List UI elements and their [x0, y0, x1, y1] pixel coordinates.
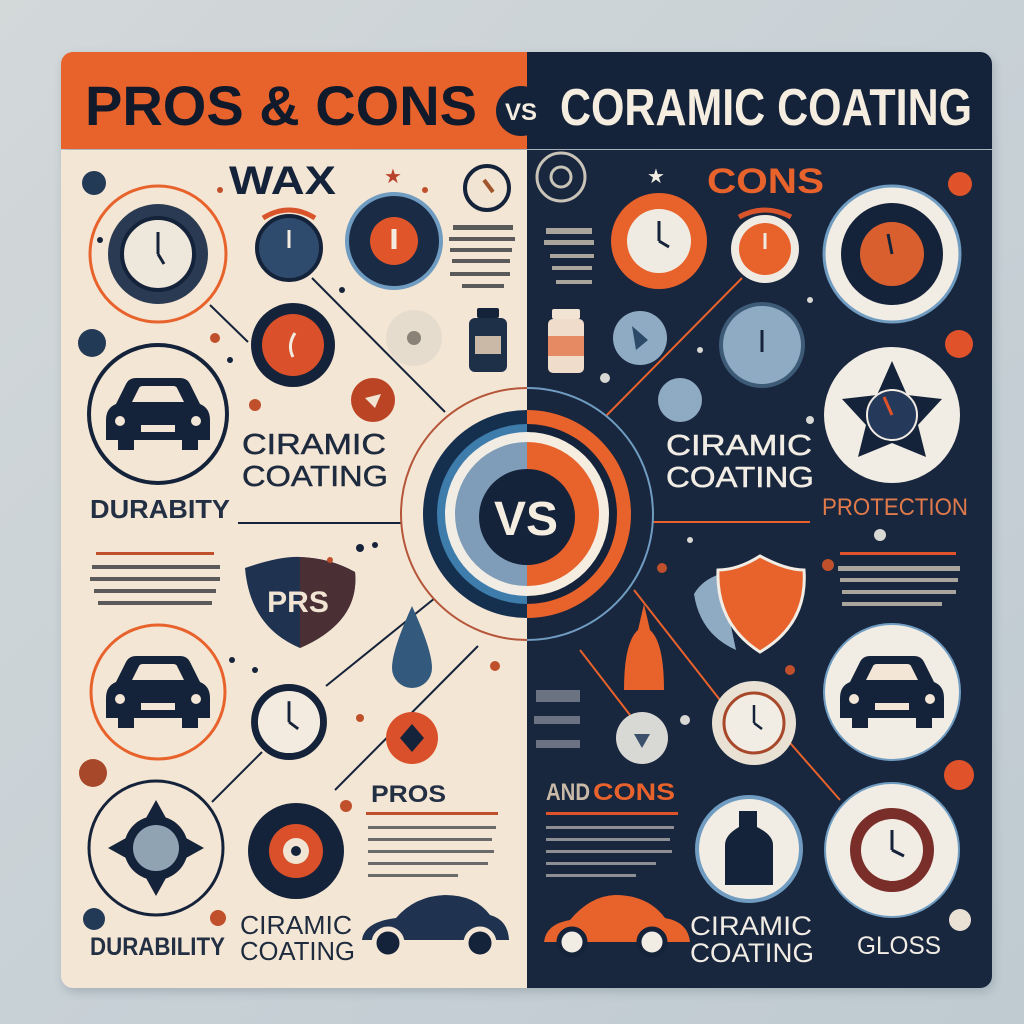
- header: navy band: [527, 52, 992, 149]
- text block right top: [544, 228, 594, 284]
- icon: diamond badge: [386, 712, 438, 764]
- icon: right large orange dial: [824, 186, 960, 322]
- label: durability bottom: DURABILITY: [90, 933, 225, 961]
- label: ceramic coating right: [666, 430, 814, 494]
- icon: red gauge: [251, 303, 335, 387]
- small dot bottom right: [949, 909, 971, 931]
- central vs target: VS: [494, 493, 558, 546]
- panel: pros side: [61, 150, 527, 988]
- icon: bottle: [469, 308, 507, 372]
- label: protection: PROTECTION: [822, 494, 968, 521]
- icon: jar right: [548, 309, 584, 373]
- icon: alarm clock: [257, 210, 321, 280]
- icon: orange car side: [544, 895, 690, 955]
- icon: gear circle: [89, 781, 223, 915]
- icon: star gauge circle: [824, 347, 960, 483]
- icon: car circle right: [824, 624, 960, 760]
- vs badge header: VS: [505, 99, 537, 126]
- dot nodes left: [78, 171, 106, 930]
- label: ceramic coating left: CIRAMIC: [242, 429, 386, 461]
- heading: cons: CONS: [707, 162, 824, 201]
- connector lines: [210, 278, 478, 802]
- icon: shield pros: PRS: [267, 586, 329, 619]
- icon: small compass: [465, 166, 509, 210]
- icon: drop: [392, 606, 432, 688]
- icon: oil bottle circle: [697, 797, 801, 901]
- icon: clock mid: [254, 688, 324, 756]
- dots right: [944, 172, 974, 790]
- label: ceramic coating bottom left: [240, 910, 355, 966]
- label: pros: PROS: [371, 781, 446, 808]
- text block pros: [366, 812, 498, 877]
- label: ceramic coating right: CIRAMIC: [666, 430, 812, 462]
- dark small discs left: [79, 759, 107, 787]
- label: ceramic coating bottom left: COATING: [240, 936, 355, 966]
- label: and cons: AND: [546, 779, 590, 806]
- label: and cons: [546, 779, 675, 806]
- text block left: [90, 552, 220, 605]
- panel: cons side: [527, 150, 992, 988]
- star right: ★: [647, 166, 665, 188]
- icon: clock right mid: [712, 681, 796, 765]
- heading: wax: WAX: [229, 159, 336, 203]
- text block cons: [546, 812, 678, 877]
- header: orange band: [61, 52, 527, 149]
- text block right: [838, 552, 960, 606]
- star left: ★: [384, 166, 402, 188]
- icon: small disc right: [616, 712, 668, 764]
- label: ceramic coating bottom right: CIRAMIC: [690, 911, 812, 941]
- label: durability: DURABITY: [90, 494, 230, 524]
- icon: target gauge: [248, 803, 344, 899]
- label: ceramic coating left: [242, 429, 388, 493]
- icon: car circle 1: [89, 345, 227, 483]
- vs badge header: [496, 86, 546, 136]
- label: ceramic coating left: COATING: [242, 461, 388, 493]
- label: and cons: CONS: [593, 779, 675, 806]
- icon: orange dial: [347, 194, 441, 288]
- icon: orange drop bottle: [624, 604, 664, 690]
- icon: ship wheel clock: [825, 783, 959, 917]
- label: ceramic coating bottom right: COATING: [690, 938, 814, 968]
- icon: right clock large: [611, 193, 707, 289]
- label: ceramic coating right: COATING: [666, 462, 814, 494]
- icon: right alarm: [731, 210, 799, 283]
- icon: small dial top right: [537, 153, 585, 201]
- icon: car circle 2: [91, 625, 225, 759]
- icon: small orange disc: [351, 378, 395, 422]
- title left: PROS & CONS: [85, 74, 477, 137]
- icon: car side navy: [362, 895, 509, 957]
- label: ceramic coating bottom left: CIRAMIC: [240, 910, 352, 940]
- icon: shield pros: [245, 557, 355, 648]
- icon: clock large left: [90, 186, 226, 322]
- icon: right pale discs: [613, 304, 803, 422]
- icon: shield right: [694, 556, 804, 652]
- label: gloss: GLOSS: [857, 932, 941, 960]
- icon: pale disc: [386, 310, 442, 366]
- label: ceramic coating bottom right: [690, 911, 814, 968]
- text block blurred: [534, 690, 580, 748]
- scatter confetti: [210, 187, 834, 926]
- text block top: [449, 225, 515, 288]
- central vs target: [401, 388, 653, 640]
